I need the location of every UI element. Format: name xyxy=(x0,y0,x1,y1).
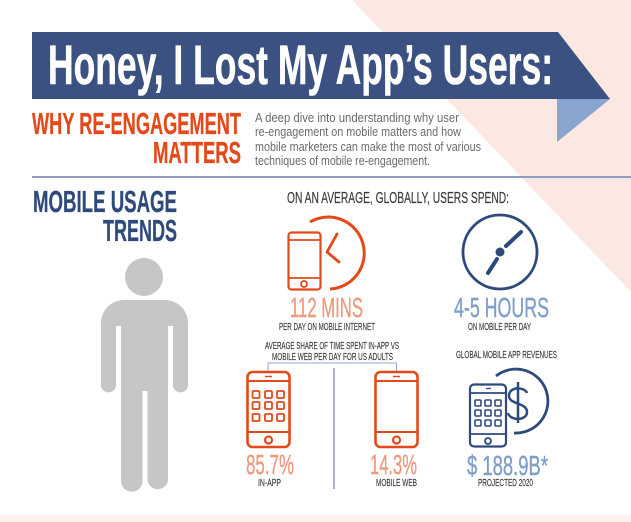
subtitle: WHY RE-ENGAGEMENT xyxy=(32,106,241,141)
stat: 14.3% mobile web xyxy=(370,449,417,489)
stat: 4-5 hours: 4-5 HOURS xyxy=(454,292,549,323)
title banner xyxy=(32,32,610,99)
icon: clock circle xyxy=(463,215,537,289)
stat: $188.9B projected xyxy=(467,450,548,489)
subtitle: MATTERS xyxy=(153,135,241,170)
stat: $188.9B projected: $ 188.9B* xyxy=(467,450,548,481)
revenue caption: GLOBAL MOBILE APP REVENUES xyxy=(456,349,557,361)
section heading: mobile usage trends: TRENDS xyxy=(103,213,177,248)
intro paragraph: techniques of mobile re-engagement. xyxy=(255,154,430,168)
intro paragraph: mobile marketers can make the most of various xyxy=(255,140,481,154)
stat: 112 mins: PER DAY ON MOBILE INTERNET xyxy=(279,321,375,333)
stat: 14.3% mobile web: MOBILE WEB xyxy=(376,477,417,489)
background: pink diagonal xyxy=(352,0,631,292)
icon: phone with dollar xyxy=(470,369,548,446)
intro paragraph: re-engagement on mobile matters and how xyxy=(255,125,462,139)
stat: 4-5 hours: ON MOBILE PER DAY xyxy=(468,321,531,333)
subtitle xyxy=(32,106,241,170)
icon: mobile web phone xyxy=(376,372,418,447)
stat: 112 mins: 112 MINS xyxy=(290,292,363,323)
icon: person silhouette xyxy=(101,258,188,492)
intro paragraph xyxy=(255,111,481,168)
banner ribbon fold xyxy=(557,99,610,142)
share of time caption: MOBILE WEB PER DAY FOR US ADULTS xyxy=(272,351,393,363)
icon: phone with clock xyxy=(288,217,364,290)
stat: 14.3% mobile web: 14.3% xyxy=(370,449,417,480)
background: bottom band xyxy=(0,515,631,522)
stat: $188.9B projected: PROJECTED 2020 xyxy=(478,477,533,489)
caption bracket xyxy=(268,363,396,371)
share of time caption xyxy=(265,340,399,363)
section divider xyxy=(32,176,631,178)
column divider xyxy=(333,368,335,489)
stat: 112 mins xyxy=(279,292,375,333)
intro paragraph: A deep dive into understanding why user xyxy=(255,111,459,125)
section heading: mobile usage trends: MOBILE USAGE xyxy=(33,184,177,219)
stat: 85.7% in-app xyxy=(246,449,294,489)
stat: 85.7% in-app: 85.7% xyxy=(246,449,294,480)
icon: in-app phone xyxy=(248,372,290,447)
stat: 4-5 hours xyxy=(454,292,549,333)
share of time caption: AVERAGE SHARE OF TIME SPENT IN-APP VS xyxy=(265,340,399,352)
section heading: mobile usage trends xyxy=(33,184,177,248)
stats heading: ON AN AVERAGE, GLOBALLY, USERS SPEND: xyxy=(287,190,509,207)
stat: 85.7% in-app: IN-APP xyxy=(258,477,281,489)
